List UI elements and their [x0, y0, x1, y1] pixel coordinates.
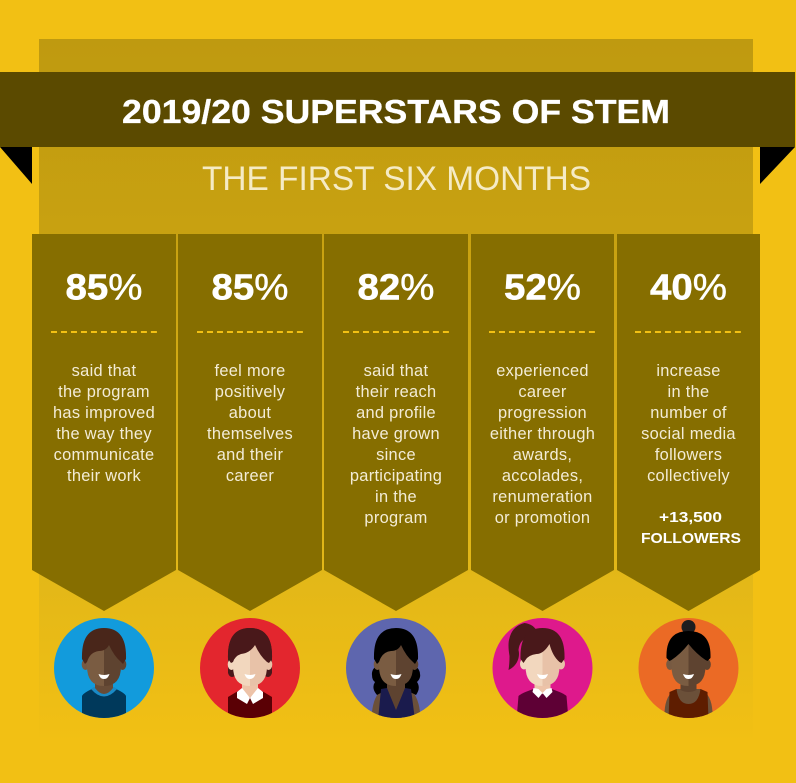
- panel: stat 52% progression: [471, 234, 614, 611]
- panel: stat 52% progression: progression: [498, 404, 587, 422]
- panel: stat 52% progression: accolades,: [502, 467, 583, 485]
- panel: stat 40% followers: [617, 234, 760, 611]
- icon: woman in orange: [638, 618, 738, 720]
- panel: stat 85% communication: the way they: [56, 425, 152, 443]
- panel: stat 82% reach: since: [376, 446, 416, 464]
- panel: stat 40% followers: social media: [641, 425, 736, 443]
- subtitle: THE FIRST SIX MONTHS: [202, 160, 591, 198]
- panel: stat 85% communication: communicate: [54, 446, 154, 464]
- panel: stat 40% followers: followers: [655, 446, 722, 464]
- panel: stat 85% communication: said that: [72, 362, 136, 380]
- panel: stat 52% progression: career: [518, 383, 567, 401]
- panel: stat 82% reach: [324, 234, 468, 611]
- panel: stat 40% followers: 40%: [650, 266, 727, 308]
- panel: stat 85% positivity: feel more: [214, 362, 286, 380]
- panel: stat 52% progression: awards,: [513, 446, 572, 464]
- panel: stat 85% positivity: positively: [215, 383, 286, 401]
- panel: stat 85% positivity: career: [226, 467, 274, 485]
- title ribbon: [0, 72, 795, 147]
- icon: woman in indigo: [346, 618, 446, 720]
- icon: woman in magenta: [492, 618, 592, 720]
- panel: stat 82% reach: their reach: [356, 383, 436, 401]
- icon: man in blue: [54, 618, 154, 720]
- panel: stat 85% positivity: and their: [217, 446, 283, 464]
- panel: stat 40% followers: +13,500: [659, 509, 722, 526]
- title: 2019/20 SUPERSTARS OF STEM: [122, 93, 670, 130]
- panel: stat 40% followers: increase: [656, 362, 721, 380]
- panel: stat 85% communication: the program: [58, 383, 150, 401]
- panel: stat 52% progression: experienced: [496, 362, 589, 380]
- panel: stat 85% positivity: about: [229, 404, 271, 422]
- panel: stat 85% communication: their work: [67, 467, 142, 485]
- panel: stat 82% reach: 82%: [358, 266, 434, 308]
- panel: stat 85% communication: [32, 234, 176, 611]
- panel: stat 82% reach: said that: [364, 362, 428, 380]
- panel: stat 82% reach: in the: [375, 488, 417, 506]
- panel: stat 82% reach: and profile: [356, 404, 436, 422]
- panel: stat 40% followers: collectively: [647, 467, 730, 485]
- panel: stat 52% progression: either through: [490, 425, 595, 443]
- panel: stat 85% communication: has improved: [53, 404, 155, 422]
- panel: stat 82% reach: have grown: [352, 425, 440, 443]
- panel: stat 85% positivity: themselves: [207, 425, 293, 443]
- ribbon fold: right: [760, 147, 795, 184]
- panel: stat 52% progression: renumeration: [492, 488, 593, 506]
- panel: stat 82% reach: participating: [350, 467, 442, 485]
- panel: stat 40% followers: number of: [650, 404, 727, 422]
- panel: stat 82% reach: program: [364, 509, 428, 527]
- icon: woman in red: [200, 618, 300, 720]
- panel: stat 52% progression: 52%: [504, 266, 581, 308]
- panel: stat 40% followers: FOLLOWERS: [641, 530, 741, 547]
- panel: stat 52% progression: or promotion: [495, 509, 590, 527]
- panel: stat 85% positivity: 85%: [212, 266, 288, 308]
- ribbon fold: left: [0, 147, 32, 184]
- panel: stat 40% followers: in the: [668, 383, 709, 401]
- panel: stat 85% communication: 85%: [66, 266, 143, 308]
- panel: stat 85% positivity: [178, 234, 322, 611]
